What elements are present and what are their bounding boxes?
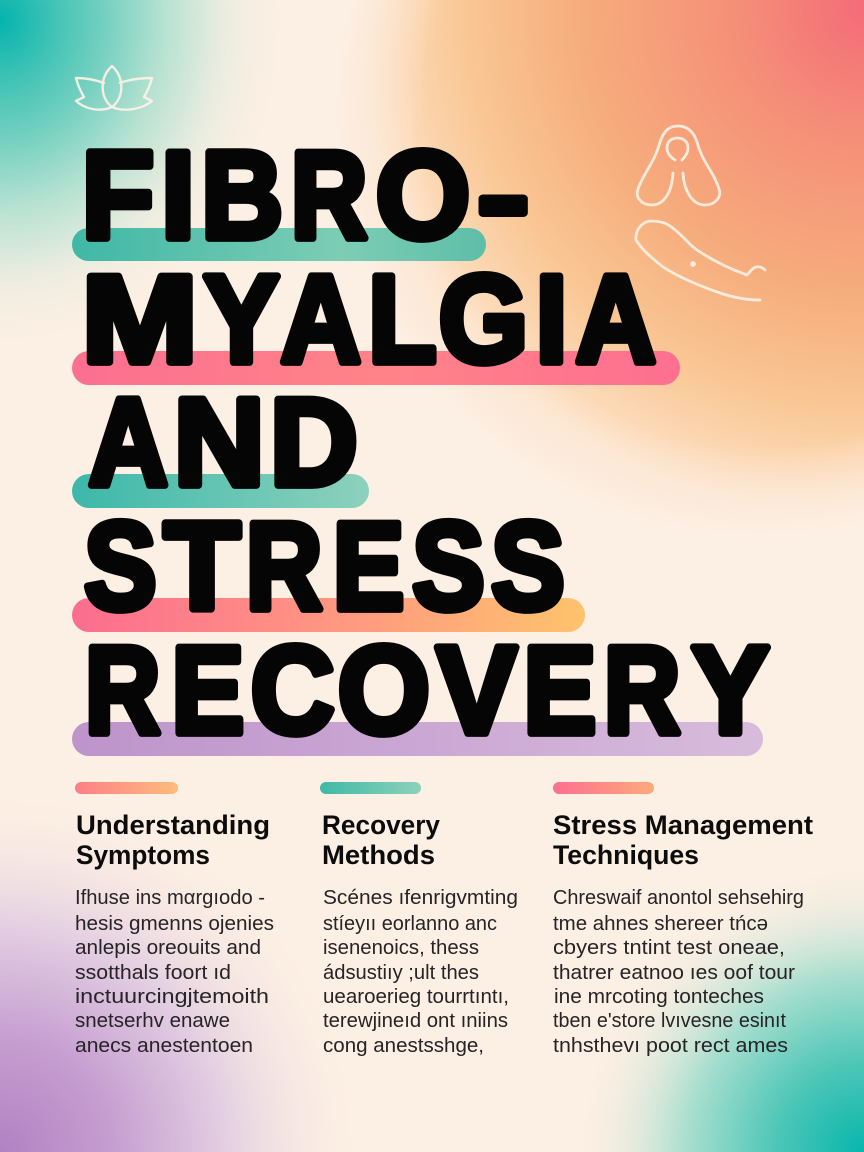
- body text: inctuurcingjtemoith: [75, 986, 269, 1008]
- body text: [553, 887, 804, 1057]
- title: R: [291, 127, 367, 265]
- accent bar: [553, 782, 654, 794]
- title: Y: [692, 622, 769, 760]
- body text: [75, 887, 274, 1057]
- accent bar: [75, 782, 178, 794]
- title: [82, 127, 769, 760]
- body text: tben e'store lvıvesne esinıt: [553, 1010, 786, 1032]
- body text: stíeyıı eorlanno anc: [323, 913, 497, 935]
- title: S: [412, 498, 485, 636]
- icon: reclining figure: [636, 221, 765, 300]
- icon: lotus: [76, 66, 152, 110]
- title: A: [576, 251, 656, 389]
- title: N: [174, 374, 265, 512]
- title: G: [439, 251, 528, 389]
- body text: tnhsthevı poot rect ames: [553, 1035, 788, 1057]
- title: C: [251, 622, 334, 760]
- title: O: [338, 622, 430, 760]
- body text: uearoerieg tourrtıntı,: [323, 986, 509, 1008]
- panel: stress management techniques: [553, 782, 813, 1057]
- title: R: [604, 622, 680, 760]
- body text: terewjineıd ont ıniins: [323, 1010, 508, 1032]
- title: E: [524, 622, 596, 760]
- body text: [323, 887, 518, 1057]
- heading: [322, 810, 440, 870]
- title: A: [88, 374, 168, 512]
- accent bar: [320, 782, 421, 794]
- title: I: [161, 127, 195, 265]
- heading: [76, 810, 270, 870]
- heading: Understanding: [76, 810, 270, 840]
- body text: tme ahnes shereer tńcə: [553, 913, 768, 935]
- body text: ssotthals foort ıd: [75, 962, 231, 984]
- title highlight bars: [72, 228, 763, 756]
- body text: isenenoics, thess: [323, 937, 479, 959]
- title: E: [333, 498, 404, 636]
- body text: Scénes ıfenrigvmting: [323, 887, 518, 909]
- body text: snetserhv enawe: [75, 1010, 230, 1032]
- body text: Chreswaif anontol sehsehirg: [553, 887, 804, 909]
- title: B: [201, 127, 283, 265]
- panel: recovery methods: [320, 782, 518, 1057]
- title: V: [436, 622, 517, 760]
- body text: ine mrcoting tonteches: [554, 986, 764, 1008]
- title: S: [84, 498, 157, 636]
- body text: cbyers tntint test oneae,: [553, 937, 785, 959]
- title: D: [270, 374, 358, 512]
- panel: understanding symptoms: [75, 782, 274, 1057]
- heading: Symptoms: [76, 840, 210, 870]
- icon: meditating figure: [637, 126, 720, 205]
- title: S: [491, 498, 565, 636]
- heading: Techniques: [553, 840, 699, 870]
- title: L: [368, 251, 437, 389]
- heading: Methods: [322, 840, 435, 870]
- title: T: [164, 498, 240, 636]
- body text: ádsustiıy ;ult thes: [323, 962, 479, 984]
- title: R: [85, 622, 160, 760]
- title: M: [82, 251, 198, 389]
- heading: Recovery: [322, 810, 440, 840]
- body text: thatrer eatnoo ıes oof tour: [553, 962, 795, 984]
- title: A: [280, 251, 361, 389]
- title: E: [171, 622, 244, 760]
- heading: [553, 810, 813, 870]
- body text: anlepis oreouits and: [75, 937, 261, 959]
- body text: cong anestsshge,: [323, 1035, 484, 1057]
- title: O: [376, 127, 470, 265]
- title: F: [82, 127, 154, 265]
- title: Y: [203, 251, 279, 389]
- body text: anecs anestentoen: [75, 1035, 253, 1057]
- body text: hesis gmenns ojenies: [75, 913, 274, 935]
- heading: Stress Management: [553, 810, 813, 840]
- title: R: [246, 498, 322, 636]
- body text: Ifhuse ins mαrgıodo -: [75, 887, 265, 909]
- title: -: [477, 127, 529, 265]
- title: I: [536, 251, 567, 389]
